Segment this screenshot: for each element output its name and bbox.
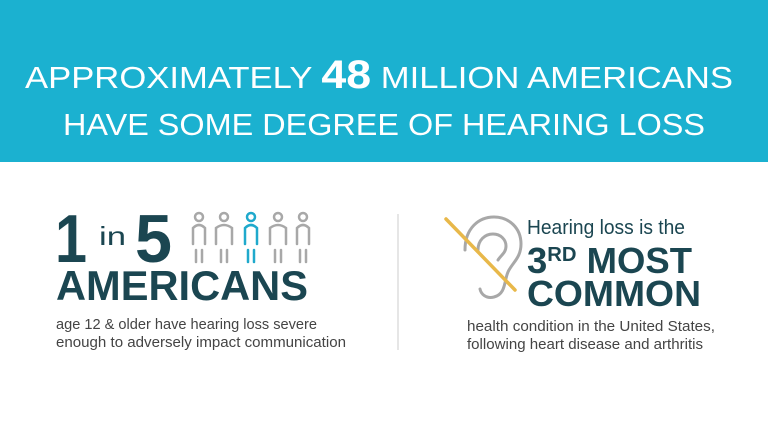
- heading: 3RD MOST COMMON: 3: [527, 240, 547, 281]
- description: following heart disease and arthritis: [467, 337, 703, 353]
- title: HAVE SOME DEGREE OF HEARING LOSS: [63, 107, 705, 142]
- stat: 1 in 5: in: [99, 221, 126, 251]
- description: [467, 319, 715, 353]
- panel: 1 in 5: [55, 201, 346, 351]
- description: health condition in the United States,: [467, 319, 715, 335]
- banner: [0, 0, 768, 162]
- heading: 3RD MOST COMMON: COMMON: [527, 273, 701, 314]
- description: enough to adversely impact communication: [56, 335, 346, 351]
- text: Hearing loss is the: Hearing loss is the: [527, 217, 685, 239]
- heading: 3RD MOST COMMON: [527, 240, 701, 314]
- heading: 3RD MOST COMMON: RD: [547, 244, 577, 266]
- heading: AMERICANS: AMERICANS: [56, 262, 308, 309]
- stat: 1 in 5: 5: [135, 201, 172, 277]
- panel: 3rd most common: [446, 217, 715, 353]
- title: [25, 53, 733, 142]
- heading: 3RD MOST COMMON: MOST: [577, 240, 692, 281]
- icon: people: [193, 213, 309, 262]
- stat: 1 in 5: [55, 201, 172, 277]
- stat: 1 in 5: 1: [55, 201, 87, 277]
- description: [56, 317, 346, 351]
- icon: crossed ear: [446, 217, 521, 297]
- title: APPROXIMATELY 48 MILLION AMERICANS: [25, 53, 733, 97]
- description: age 12 & older have hearing loss severe: [56, 317, 317, 333]
